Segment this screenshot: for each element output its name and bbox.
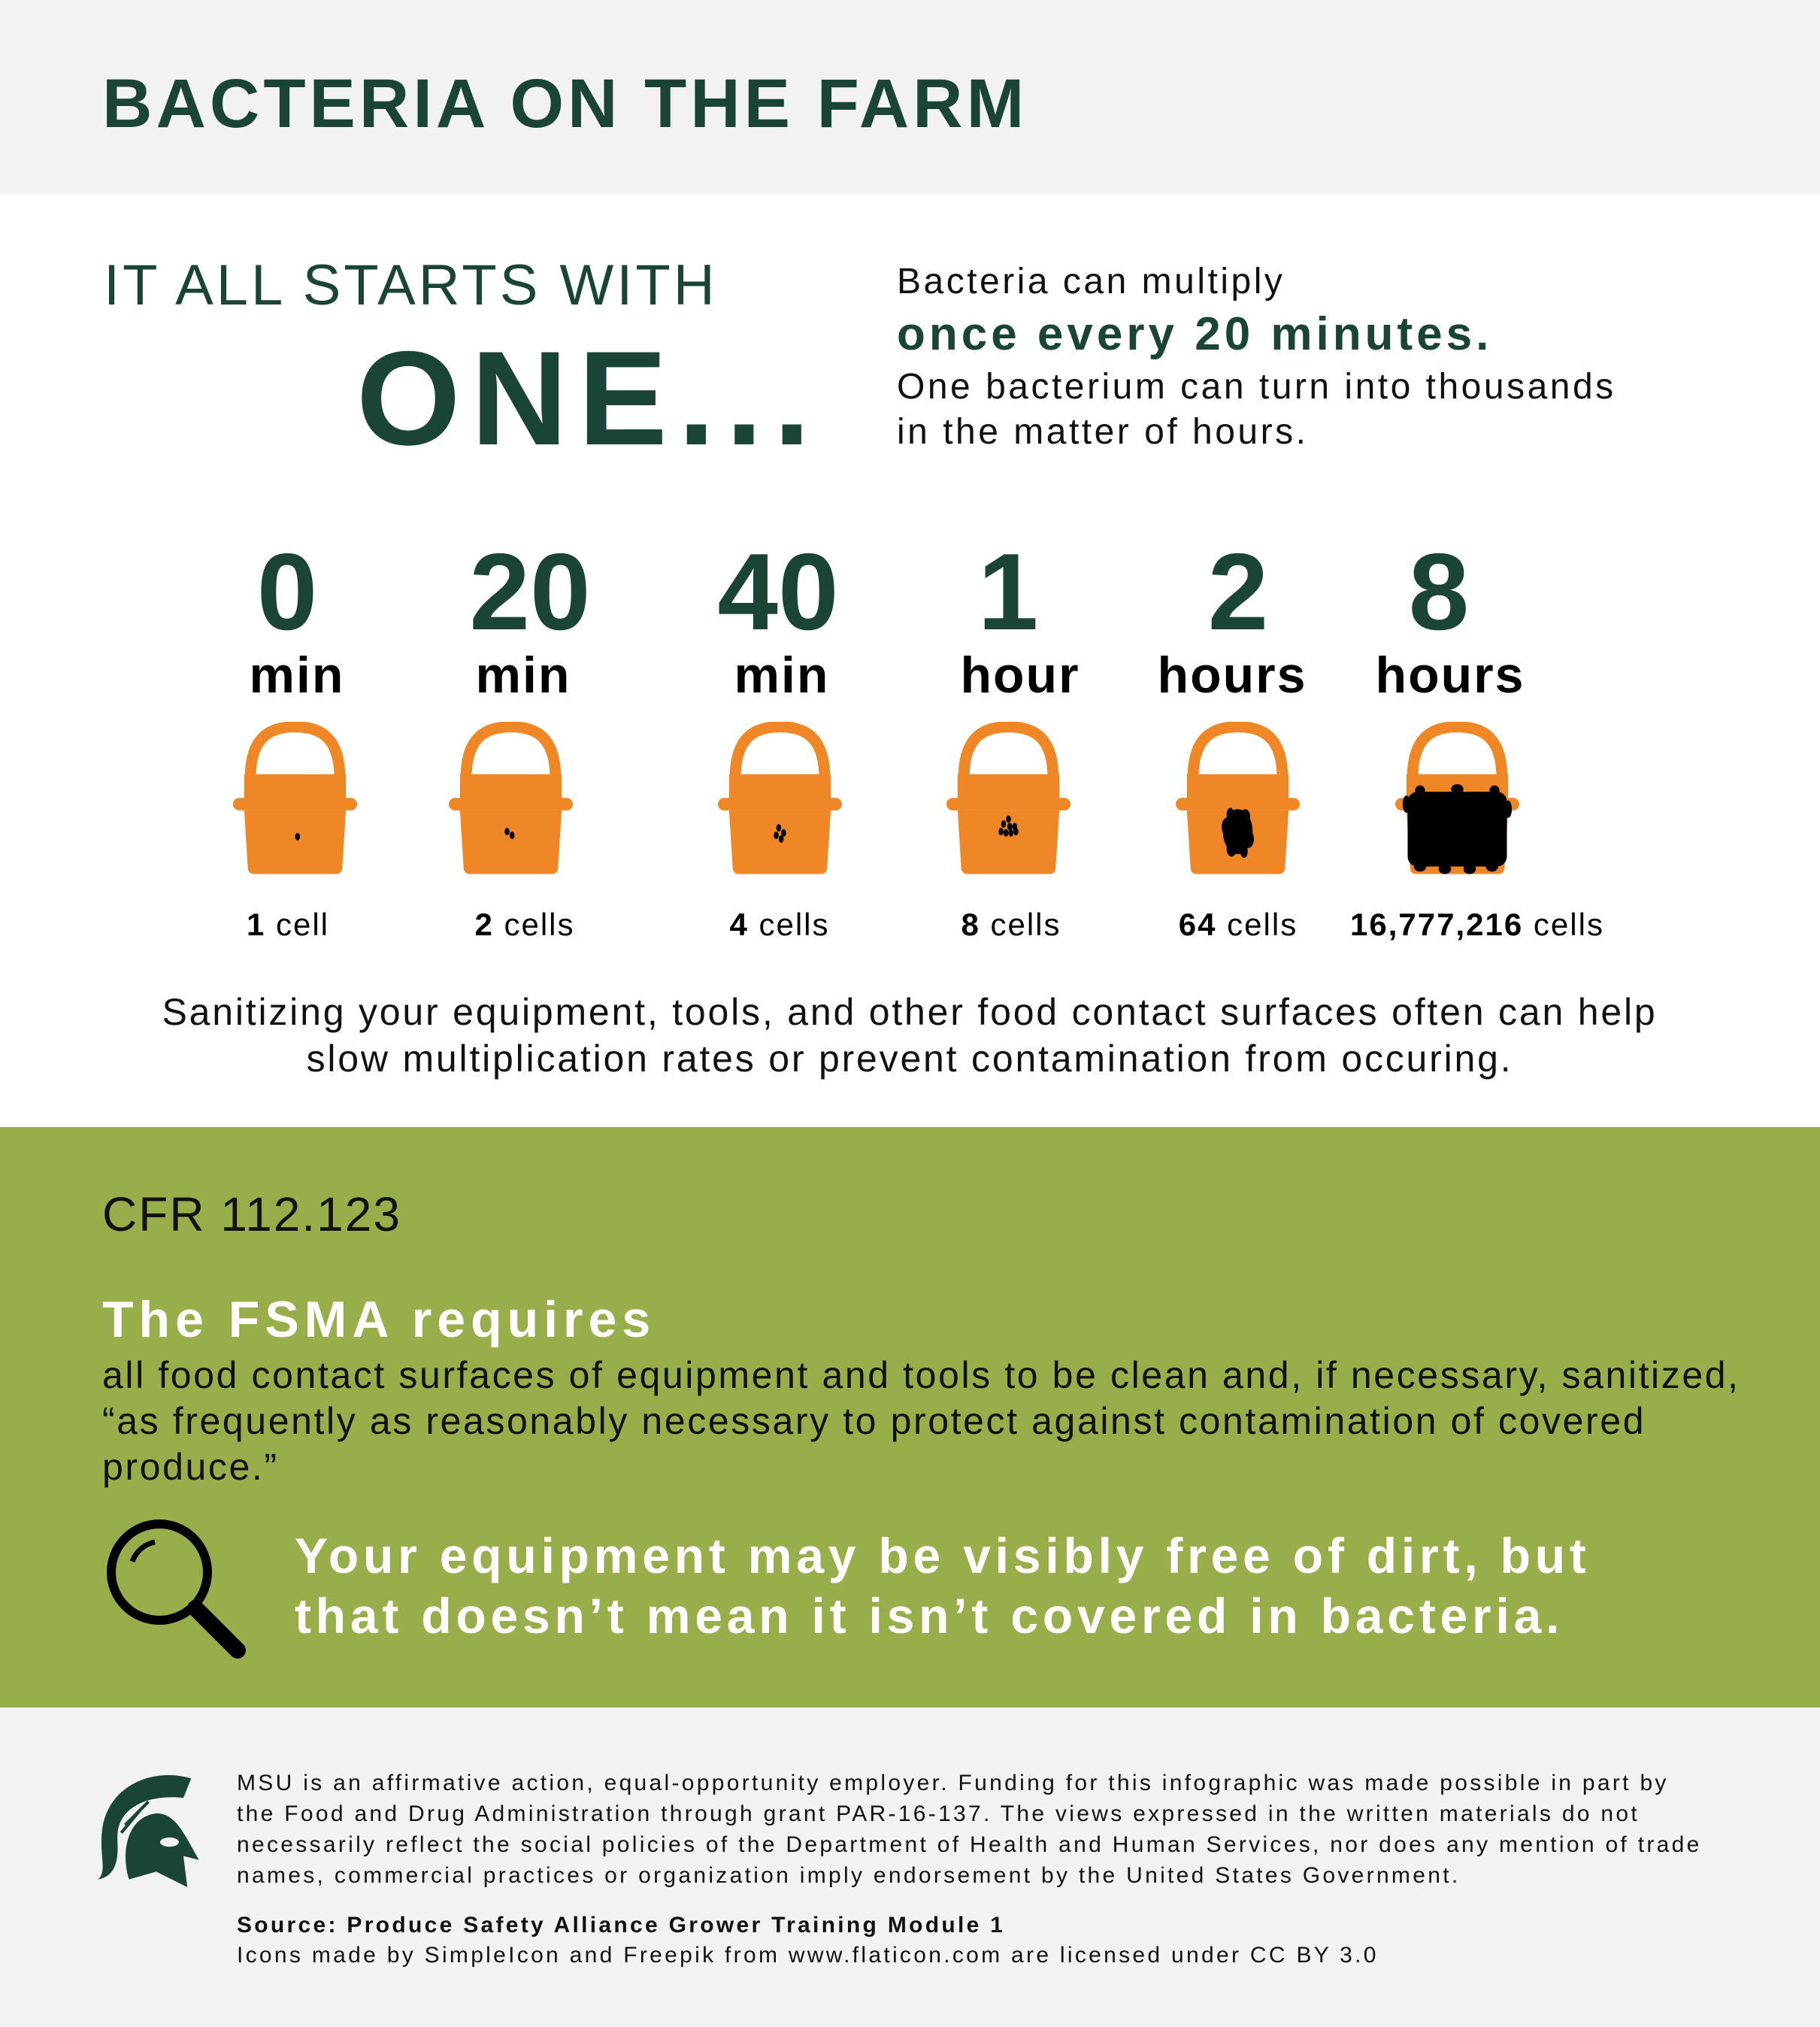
source text: Source: Produce Safety Alliance Grower Training Module 1 [237,1913,1005,1938]
FSMA body: produce.” [102,1446,279,1488]
FSMA body: all food contact surfaces of equipment and tools to be clean and, if necessary, sanitized, [102,1354,1740,1396]
text block: multiply info: One bacterium can turn into thousands [897,367,1616,407]
timeline: 8 [1409,531,1469,653]
heading: it all starts with: IT ALL STARTS WITH [104,253,718,317]
cell counts: 1 cell [247,907,329,942]
timeline: 20 [469,531,591,653]
callout [295,1528,1591,1644]
timeline: hours [1158,647,1307,704]
text block: sanitizing [162,991,1657,1080]
timeline: 40 [717,531,839,653]
disclaimer text: the Food and Drug Administration through grant PAR-16-137. The views expressed in the written materials do not [237,1801,1640,1826]
text block: multiply info: in the matter of hours. [897,412,1308,452]
callout: Your equipment may be visibly free of dirt, but [295,1528,1591,1583]
FSMA heading: The FSMA requires [102,1291,656,1348]
footer [0,1707,1820,2027]
timeline: 1 [978,531,1038,653]
icon: magnifier [107,1519,246,1659]
source text: Icons made by SimpleIcon and Freepik from www.flaticon.com are licensed under CC BY 3.0 [237,1943,1379,1968]
icons: buckets [233,722,1519,874]
timeline: hours [1376,647,1525,704]
disclaimer text: names, commercial practices or organization imply endorsement by the United States Government. [237,1863,1460,1888]
icon: spartan logo [98,1775,199,1887]
cell counts: 2 cells [474,907,575,942]
source text [237,1913,1379,1968]
units: min [250,647,344,704]
cell counts: 4 cells [729,907,830,942]
FSMA body: “as frequently as reasonably necessary to protect against contamination of covered [102,1400,1646,1442]
text block: sanitizing: Sanitizing your equipment, tools, and other food contact surfaces often can help [162,991,1657,1033]
timeline: hour [960,647,1080,704]
disclaimer text: MSU is an affirmative action, equal-opportunity employer. Funding for this infographic was made possible in part by [237,1771,1669,1795]
text block: sanitizing: slow multiplication rates or prevent contamination from occuring. [307,1038,1513,1080]
cell counts: 16,777,216 cells [1350,907,1604,942]
timeline [250,531,1525,704]
text block: multiply info: once every 20 minutes. [897,308,1492,360]
text block: multiply info [897,262,1616,452]
panel: FSMA green [0,1127,1820,1707]
disclaimer text: necessarily reflect the social policies of the Department of Health and Human Services, nor does any mention of trade [237,1832,1702,1857]
FSMA body [102,1354,1740,1488]
cell counts [247,907,1604,942]
heading: one: ONE... [356,323,821,473]
timeline: min [476,647,571,704]
numbers: 0 [257,531,317,653]
callout: that doesn’t mean it isn’t covered in bacteria. [295,1588,1564,1644]
cell counts: 8 cells [961,907,1061,942]
cell counts: 64 cells [1179,907,1298,942]
timeline: 2 [1208,531,1268,653]
disclaimer text [237,1771,1702,1888]
header band [0,0,1820,194]
timeline: min [734,647,829,704]
CFR heading: CFR 112.123 [102,1187,401,1241]
title: BACTERIA ON THE FARM [102,65,1028,142]
text block: multiply info: Bacteria can multiply [897,262,1285,301]
